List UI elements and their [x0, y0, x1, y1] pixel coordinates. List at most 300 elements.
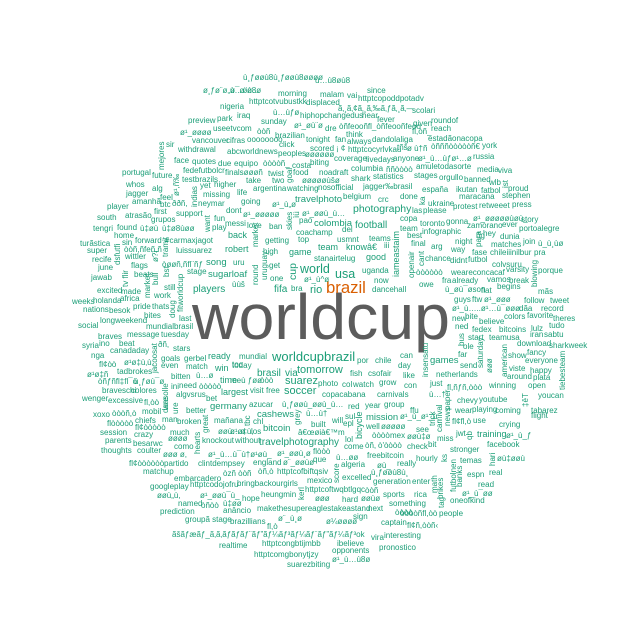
words: middle left: òñƒñfl‡fl¯ò	[98, 377, 138, 386]
words: top centre: roundof	[431, 116, 459, 125]
words: centre: watch	[352, 380, 374, 389]
words: bottom right: use	[473, 416, 486, 425]
words: bottom centre: ø¼øøøø	[326, 517, 357, 526]
words: centre: market	[251, 222, 260, 247]
words: middle right: weareconcacaf	[450, 268, 506, 277]
words: bottom left: ure	[171, 402, 180, 414]
words: centre: òñ,	[365, 441, 376, 450]
words: bottom centre: opponents	[332, 546, 369, 555]
words: medium frequency: training	[477, 429, 507, 439]
words: centre: like	[403, 371, 416, 380]
words: bottom right: crying	[499, 420, 520, 429]
words: bottom centre: httptcoftwqbtlgqc	[305, 485, 365, 494]
words: top centre	[230, 73, 560, 241]
words: bottom left: knockout	[202, 436, 235, 445]
words: bottom left: fl¢òòòòò	[135, 423, 166, 432]
words: top centre: ikutan	[456, 185, 477, 194]
words: top centre: costa	[292, 161, 312, 170]
words: bottom right: futbolnen	[449, 459, 458, 492]
words: top left: found	[117, 223, 137, 232]
words: centre: come	[344, 442, 364, 451]
words: top centre: ù…ù8øù8	[315, 76, 351, 85]
words: bottom right: news	[443, 407, 452, 426]
words: top centre: belgium	[343, 192, 371, 201]
words: top left: sir	[166, 140, 175, 149]
words: middle right	[407, 230, 588, 410]
words: top centre: ø ù†ñ	[407, 144, 427, 153]
words: top left: iraq	[237, 111, 250, 120]
words: centre: red	[348, 402, 360, 411]
words: top centre: best	[407, 231, 423, 240]
words: bottom centre: øøùø	[361, 494, 380, 503]
words: bottom centre: øù_	[377, 461, 391, 470]
words: top centre: think	[346, 130, 364, 139]
words: top left: dont	[226, 206, 242, 215]
words: top left: fedefutbolcr	[183, 166, 225, 175]
words: bottom centre: ibelieve	[337, 539, 365, 548]
words: middle left: super	[87, 246, 107, 255]
words: bottom right: ø¹_ù_ø¹_ù_	[400, 412, 442, 421]
words: bottom centre: òòñ	[365, 486, 378, 495]
words: bottom centre: next	[368, 504, 384, 513]
main word: worldcup: worldcup	[191, 281, 450, 353]
words: middle left: ø?ì	[151, 250, 160, 262]
words: bottom right: ffu	[410, 406, 419, 415]
words: middle right: fase	[472, 248, 488, 257]
words: middle right: send	[460, 361, 477, 370]
words: medium frequency: germany	[210, 401, 247, 412]
words: middle right: everyone	[525, 356, 558, 365]
words: bottom right: temas	[460, 456, 482, 465]
words: top centre: fl,òñ_	[412, 127, 432, 136]
words: medium frequency: iameastaim	[391, 231, 401, 277]
words: bottom left: better	[186, 406, 207, 415]
words: middle right: porque	[538, 266, 563, 275]
words: bottom right: stronger	[450, 445, 480, 454]
words: middle left: wittler	[124, 252, 146, 261]
words: centre: con	[404, 381, 417, 390]
words: top centre: going	[241, 197, 261, 206]
words: bottom right: real	[489, 468, 503, 477]
words: medium frequency: mission	[366, 412, 398, 423]
words: middle right: tudo	[549, 321, 565, 330]
words: bottom left: dare	[161, 396, 170, 413]
words: top centre: ù…øù8ø	[230, 86, 261, 95]
words: top left	[93, 86, 278, 240]
words: top centre: ban	[269, 222, 282, 231]
words: middle left: turãstica	[80, 239, 111, 248]
words: middle right: way	[450, 245, 465, 254]
words: middle left: even	[161, 361, 178, 370]
words: bottom centre: score	[332, 463, 341, 483]
words: middle right: øøø	[485, 358, 494, 373]
words: medium frequency: suarez	[285, 375, 318, 387]
words: middle right: far	[458, 350, 468, 359]
words: middle left: canadaday	[110, 346, 149, 355]
words: bottom left: embarcadero	[174, 474, 222, 483]
words: top centre: vai	[347, 91, 357, 100]
words: bottom left: thoughts	[101, 446, 132, 455]
words: top centre: las	[412, 206, 422, 215]
words: middle left: ø¹ø‡ù‚ù,	[124, 358, 154, 367]
words: top centre: since	[367, 86, 386, 95]
words: middle right: lulz	[531, 324, 543, 333]
words: top centre: ukraine	[428, 199, 455, 208]
words: top centre: oooooooo	[247, 135, 283, 144]
words: top centre: morning	[278, 89, 307, 98]
words: middle left: braveschi	[102, 386, 136, 395]
word cloud	[71, 73, 588, 569]
words: top centre: food	[293, 168, 309, 177]
words: top centre: retweeet	[479, 201, 510, 210]
words: bottom centre: ù¸ƒøøù8ù¸	[371, 468, 408, 477]
words: top left: abcworldnews	[227, 147, 278, 156]
words: top left: equipo	[234, 159, 259, 168]
words: top left: jagger	[125, 189, 149, 198]
words: top centre: goal	[285, 168, 294, 183]
words: centre: ù¸ƒøøù_øøù_ù…	[282, 400, 343, 409]
words: middle right: ù…†	[429, 390, 446, 399]
words: centre: por	[357, 356, 369, 365]
words: middle right: netherlands	[436, 370, 478, 379]
words: bottom centre: ø¨_ù¸ø	[278, 514, 302, 523]
words: middle right: follow	[524, 296, 545, 305]
words: middle left: need	[179, 381, 197, 390]
words: middle right: iran	[530, 330, 543, 339]
words: top centre: httptcotvubustkk	[249, 97, 308, 106]
words: middle right: owe	[419, 280, 434, 289]
words: top centre: nosofficial	[318, 183, 354, 192]
words: middle left: jacoosat	[150, 342, 159, 374]
words: bottom right: hari	[488, 452, 497, 466]
words: middle right: american	[500, 344, 509, 377]
words: middle left: pride	[133, 302, 151, 311]
words: middle right: bitcoins	[499, 325, 526, 334]
words: bottom centre: mexico	[307, 476, 333, 485]
words: bottom left: httptcodojofru	[190, 480, 238, 489]
words: middle left: nga	[91, 351, 105, 360]
words: bottom right: espn	[467, 470, 484, 479]
words: centre: well	[365, 422, 380, 431]
words: centre: dancehall	[372, 285, 406, 294]
words: top left: ù‡ø8ùøø	[162, 224, 195, 233]
words: centre: free	[266, 386, 280, 395]
words: middle right: dãa	[519, 304, 533, 313]
words: middle right: mãs	[538, 287, 553, 296]
words: centre: los	[251, 427, 261, 436]
words: middle right: fra	[442, 276, 452, 285]
words: top centre: fever	[377, 115, 395, 124]
words: bottom left: flòòòòò	[107, 419, 134, 428]
words: bottom right: read	[478, 480, 494, 489]
words: top left: alg	[152, 184, 163, 193]
words: centre: chl	[253, 417, 263, 426]
words: top centre: ø¹_øù¨ø	[294, 121, 323, 130]
words: top centre: banned	[464, 175, 491, 184]
words: top centre: ø¹_øøøøø	[243, 210, 280, 219]
words: middle left: thats	[152, 302, 169, 311]
words: centre: ø¹ø‡ù,	[230, 427, 254, 436]
words: middle right: varsity	[506, 265, 529, 274]
words: top centre: life	[237, 188, 248, 197]
words: centre: one	[270, 274, 284, 283]
words: top centre: øøøøøùšø	[302, 176, 340, 185]
words: bottom right: carnival	[435, 404, 444, 432]
words: bottom centre: freebitcoin	[367, 451, 404, 460]
words: top centre: maracana	[459, 192, 495, 201]
words: bottom centre: httptcofbiftqsiv	[277, 467, 328, 476]
words: bottom centre: hard	[342, 495, 358, 504]
words: centre: high	[263, 247, 278, 256]
words: centre: mundial	[239, 352, 267, 361]
words: centre: group	[384, 400, 405, 409]
words: top centre: watching	[286, 184, 319, 193]
words: centre: tbc	[243, 415, 252, 426]
words: middle right: fl,ñƒñ,òòò	[447, 383, 483, 392]
words: centre: grey	[293, 409, 302, 425]
words: bottom right: math	[430, 475, 439, 493]
words: top left: player	[107, 202, 129, 211]
words: top left: ø¹,ñ‰	[172, 174, 181, 196]
words: centre: azucar	[249, 400, 273, 409]
words: middle left: tuesday	[161, 330, 189, 339]
words: centre: ø¹_ù^ø	[304, 275, 329, 284]
words: top centre: statistics	[373, 172, 404, 181]
words: bottom right: facebook	[487, 440, 520, 449]
words: top centre: biting	[310, 158, 329, 167]
words: medium frequency: song	[206, 257, 227, 268]
words: bottom left: realtime	[219, 541, 248, 550]
words: middle right: theres	[553, 314, 575, 323]
words: bottom left: òñòò	[201, 501, 219, 510]
words: middle right: colvsuru	[492, 260, 522, 269]
words: top centre: story	[521, 215, 538, 224]
words: middle left: wenger	[81, 394, 109, 403]
words: bottom centre: hope	[242, 494, 260, 503]
words: middle right: òòòòòò	[416, 268, 443, 277]
words: middle left: social	[78, 321, 99, 330]
words: bottom centre: ø¨_øøùø	[283, 458, 314, 467]
words: top left: neymar	[198, 199, 225, 208]
words: top centre: httptcocyrlvkau	[348, 145, 401, 154]
words: centre: col	[342, 380, 352, 389]
words: top centre: given	[413, 119, 432, 128]
words: bottom right: jwt	[455, 429, 467, 438]
words: centre: fish	[350, 369, 362, 378]
words: centre: â€œøià€™m	[298, 428, 345, 437]
words: middle left: fl,òò	[144, 398, 160, 407]
words: middle right: open	[528, 381, 546, 390]
words: middle left: still	[164, 283, 176, 292]
words: top centre: ist	[501, 179, 510, 188]
words: medium frequency: bicycle	[354, 411, 364, 439]
words: middle left: ùùš	[232, 280, 245, 289]
words: bottom left: mañana	[214, 416, 243, 425]
words: middle right: winning	[488, 381, 516, 390]
words: top left: feel	[160, 193, 173, 202]
words: centre: chile	[375, 356, 392, 365]
words: middle left: bitten	[171, 372, 191, 381]
words: middle left: holanda	[93, 296, 122, 305]
words: middle left: fl¢òò	[99, 360, 117, 369]
words: middle left: win	[214, 363, 229, 373]
words: middle right: show	[508, 351, 527, 360]
words: centre: usmnt	[337, 235, 360, 244]
words: middle right: viste	[509, 364, 526, 373]
words: middle right: teamusa	[489, 333, 520, 342]
words: bottom left	[93, 396, 366, 550]
words: middle left: beat	[119, 339, 135, 348]
words: centre	[230, 222, 417, 451]
words: bottom left: besarwc	[133, 439, 163, 448]
words: middle right: bite	[465, 312, 478, 321]
words: top centre: ¡ ¢	[336, 144, 345, 153]
words: middle left: back	[228, 230, 248, 240]
words: bottom right: ø¹_ù_ƒ	[506, 431, 531, 440]
words: bottom left: man	[162, 415, 178, 424]
words: middle left: forward	[135, 236, 162, 245]
words: middle left: work	[153, 291, 172, 300]
words: middle left: last	[179, 314, 192, 323]
words: centre: ù…ù†	[306, 409, 327, 418]
words: medium frequency: colombia	[314, 218, 353, 229]
words: top centre: del	[342, 225, 353, 234]
words: medium frequency: cashews	[257, 409, 294, 420]
words: top centre: stephen	[502, 191, 530, 200]
words: top centre: anyone	[393, 154, 420, 163]
words: top centre: viva	[498, 166, 513, 175]
words: bottom centre: excelled	[342, 473, 371, 482]
words: bottom right: trick	[428, 410, 437, 426]
words: bottom left: mobil	[142, 407, 161, 416]
words: medium frequency: football	[355, 220, 387, 231]
words: bottom left: hearts	[193, 432, 202, 454]
words: middle left: made	[121, 287, 142, 296]
words: top centre: tonight	[306, 135, 331, 144]
words: medium frequency: players	[193, 284, 225, 295]
words: middle right: fedex	[472, 325, 492, 334]
words: top centre: ever	[502, 220, 518, 229]
words: top centre: twist	[268, 169, 285, 178]
words: centre: stanairtelug	[314, 254, 355, 263]
words: bottom right: tabarez	[531, 406, 558, 415]
words: middle right: already	[452, 276, 478, 285]
words: middle left: africa	[120, 294, 140, 303]
words: bottom left: øøù„ù,	[157, 491, 181, 500]
words: medium frequency: travelphotography	[259, 437, 339, 448]
words: bottom centre: sign	[353, 512, 368, 521]
words: middle left: doug	[168, 300, 177, 318]
words: top left: whos	[125, 180, 145, 189]
words: middle right: happy	[530, 366, 552, 375]
words: middle right: new	[452, 314, 467, 323]
words: middle left: braves	[98, 332, 122, 341]
words: top left: preview	[188, 116, 216, 125]
words: top left: indias	[190, 186, 199, 207]
words: middle right: flat	[481, 286, 492, 295]
words: centre: ò'òòòò	[378, 441, 402, 450]
words: top left: ù‡øù	[140, 224, 158, 233]
words: top left: mejores	[157, 142, 166, 170]
words: middle right: plata	[533, 373, 551, 382]
words: top centre: ù¸ƒøøù8ù¸ƒøøù8øøøø	[243, 73, 323, 82]
words: middle left: flags	[131, 261, 148, 270]
words: medium frequency: via	[285, 368, 298, 379]
words: bottom centre: ø¹_øøù¸ø	[277, 449, 311, 458]
words: bottom centre: fl,ò	[267, 522, 278, 531]
words: top centre: scored	[310, 144, 334, 153]
words: top centre: brazilian	[275, 131, 305, 140]
words: top left: messi	[225, 219, 246, 228]
words: bottom left: como	[174, 442, 194, 451]
words: top left: due	[218, 159, 232, 168]
words: bottom right: brikes	[436, 478, 445, 499]
words: top centre: displaced	[306, 98, 340, 107]
words: middle left: ù…ø	[196, 371, 213, 380]
words: top centre: argentina	[253, 184, 287, 193]
words: top centre: tñš	[397, 143, 408, 152]
words: medium frequency: tomorrow	[297, 364, 343, 376]
words: top centre: wlb	[488, 178, 502, 187]
words: middle left: bull	[151, 272, 160, 285]
words: middle right: ø¹_øøø	[484, 295, 511, 304]
words: top centre: ññòòòò	[386, 165, 413, 174]
words: medium frequency: sugarloaf	[208, 269, 247, 280]
words: middle right: youcan	[538, 391, 564, 400]
words: middle right: ftw	[472, 295, 482, 304]
words: bottom right: people	[439, 509, 464, 518]
words: medium frequency: world	[299, 262, 330, 276]
words: bottom left: coulter	[137, 446, 161, 455]
words: bottom left: parents	[105, 436, 132, 445]
words: middle left: tramit	[161, 236, 170, 257]
words: top centre: coach	[296, 228, 317, 237]
words: top centre: ã‚¸ã‚¢ã‚¸ã‚‰ã‚ƒã‚¸ã‚—	[338, 104, 414, 113]
words: top centre: crc	[378, 195, 389, 204]
words: top centre: proud	[508, 184, 528, 193]
words: bottom left: matchup	[143, 467, 174, 476]
words: bottom left: chiefs	[135, 416, 156, 425]
words: middle left: wasolle	[161, 383, 170, 411]
words: top centre: dre	[325, 124, 337, 133]
words: top left: grupos	[151, 215, 175, 224]
words: bottom right: hourly	[416, 454, 438, 463]
words: middle left: #carmaxjagot	[165, 236, 214, 245]
words: bottom right: òòòòñfl,òò	[400, 509, 438, 518]
words: centre: getting	[265, 236, 289, 245]
words: middle right: didnt	[450, 256, 468, 265]
words: centre: built	[311, 420, 326, 429]
words: top centre: òòòòñ_	[263, 159, 290, 168]
words: middle left: beats	[134, 270, 154, 279]
words: bottom centre: ø¹_ù…ù8ø	[332, 555, 370, 564]
words: top centre: jagger‰brasil	[362, 182, 413, 191]
words: middle left: excited	[97, 286, 122, 295]
words: middle left: òòñ,ñfeñ,ñ	[124, 245, 162, 254]
words: middle left: message	[127, 330, 160, 339]
words: middle right: break	[509, 276, 530, 285]
words: bottom left: crazy	[134, 430, 153, 439]
words: top centre: noadraft	[319, 168, 349, 177]
words: bottom left: fl¢òòòòòò	[129, 459, 165, 468]
words: middle left: ðñ,	[158, 340, 169, 349]
words: middle left: uru	[233, 258, 245, 267]
words: middle right: ù_ù¸ùø	[538, 239, 563, 248]
words: middle right: insensatu	[421, 343, 430, 377]
words: centre: sul	[345, 412, 355, 421]
words: centre: photo	[318, 379, 339, 388]
words: top centre: ø¹_ù„ø	[272, 200, 296, 209]
